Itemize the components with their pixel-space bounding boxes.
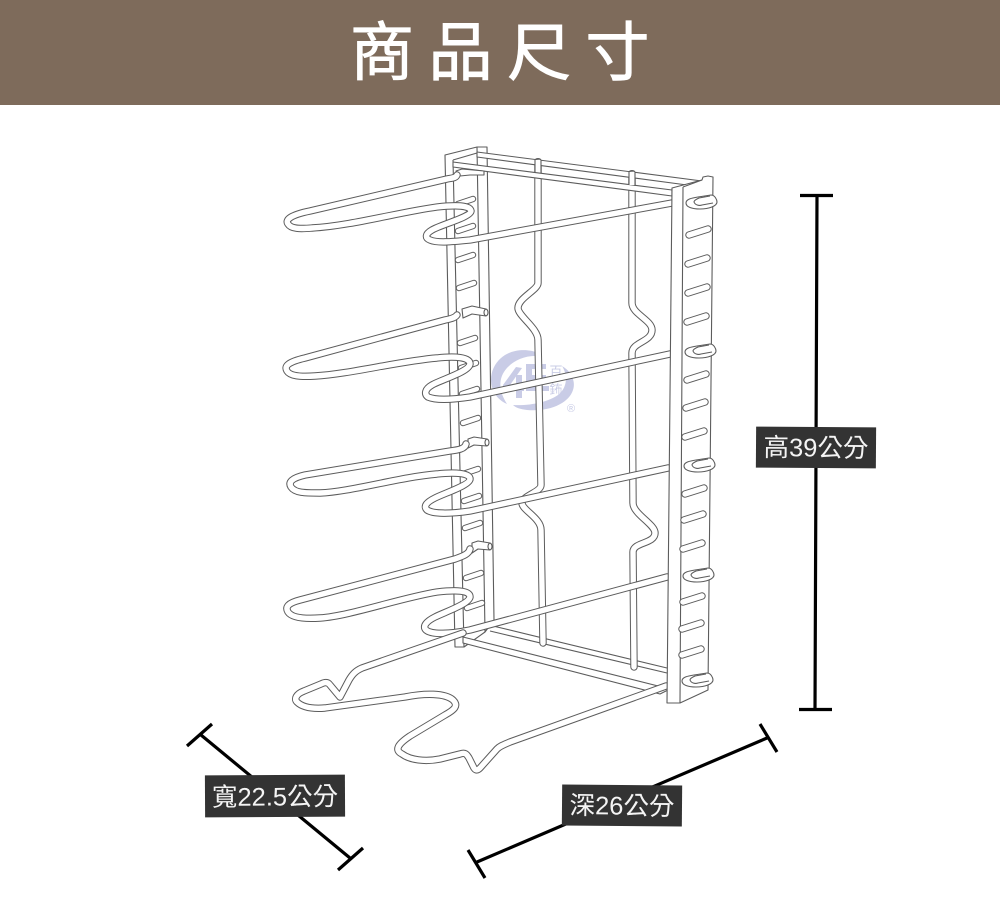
width label: 寬22.5公分 [212,783,338,812]
center wires [518,163,655,667]
rear bottom rail [490,626,667,673]
depth label: 深26公分 [569,792,675,821]
shelf arm 3 [290,444,668,513]
front bottom rail [463,637,670,694]
width label [205,775,345,817]
shelf arm 1 [287,175,672,242]
dimension: height [756,195,876,710]
watermark logo [491,350,575,415]
dimension: depth [468,724,777,878]
depth label [562,784,682,827]
height label: 高39公分 [763,434,869,463]
top rails [453,152,702,196]
dimension: width [187,724,363,870]
header band [0,0,1000,105]
shelf arm 2 [286,315,670,399]
title: 商品尺寸 [350,17,664,89]
watermark logo: 百 [549,364,563,379]
height label [756,427,876,468]
right post [667,176,717,703]
left post [445,147,494,647]
watermark logo: 鈽 [549,382,563,397]
mounting pins [456,169,492,553]
shelf arm 5 [296,633,666,770]
product: pan rack [286,147,717,770]
watermark logo: ® [567,403,575,415]
shelf arm 4 [287,549,667,633]
